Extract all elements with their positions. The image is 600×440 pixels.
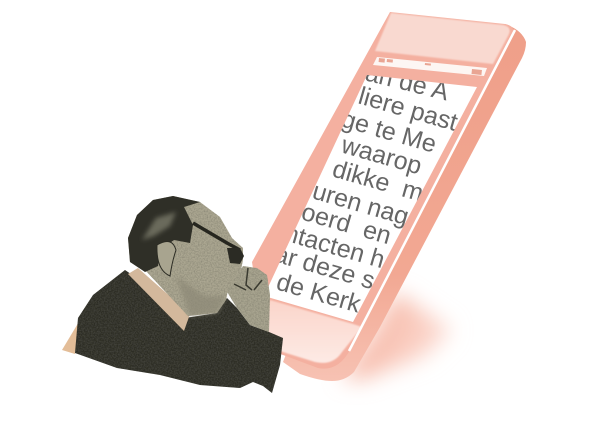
screen text: waarop: [337, 131, 425, 180]
white edge highlight: [349, 30, 515, 351]
screen text: de Kerk: [273, 268, 364, 319]
finger lines: [234, 268, 262, 290]
screen text: [277, 75, 458, 313]
illustration: man looking at phone: [62, 12, 526, 393]
bottom glossy panel: [262, 300, 362, 363]
top glossy panel: [375, 13, 510, 64]
phone face: [252, 12, 514, 369]
screen text: ntacten h: [281, 219, 388, 274]
jacket: [75, 270, 283, 393]
collar: [128, 268, 190, 331]
hair highlight: [142, 212, 176, 240]
screen text: ge te Me: [338, 105, 440, 159]
face shadow: [176, 276, 226, 316]
screen text: oerd en: [298, 198, 394, 250]
ear: [157, 241, 176, 276]
glasses: [193, 223, 240, 250]
status bar: [373, 57, 487, 76]
screen text: an de A: [363, 59, 452, 106]
phone: [252, 12, 526, 381]
phone side: [283, 24, 526, 381]
hair: [128, 196, 200, 272]
screen text: liere past: [355, 82, 461, 137]
phone shadow: [342, 292, 452, 380]
head: [128, 196, 243, 316]
screen text: uren nag: [309, 177, 412, 231]
screen: [264, 75, 477, 322]
man: [62, 196, 283, 393]
screen text: ar deze s: [271, 240, 378, 295]
glasses lens: [227, 248, 244, 264]
screen text: dikke m: [329, 155, 427, 207]
torn paper scrap: [62, 320, 80, 354]
hand: [226, 266, 270, 332]
